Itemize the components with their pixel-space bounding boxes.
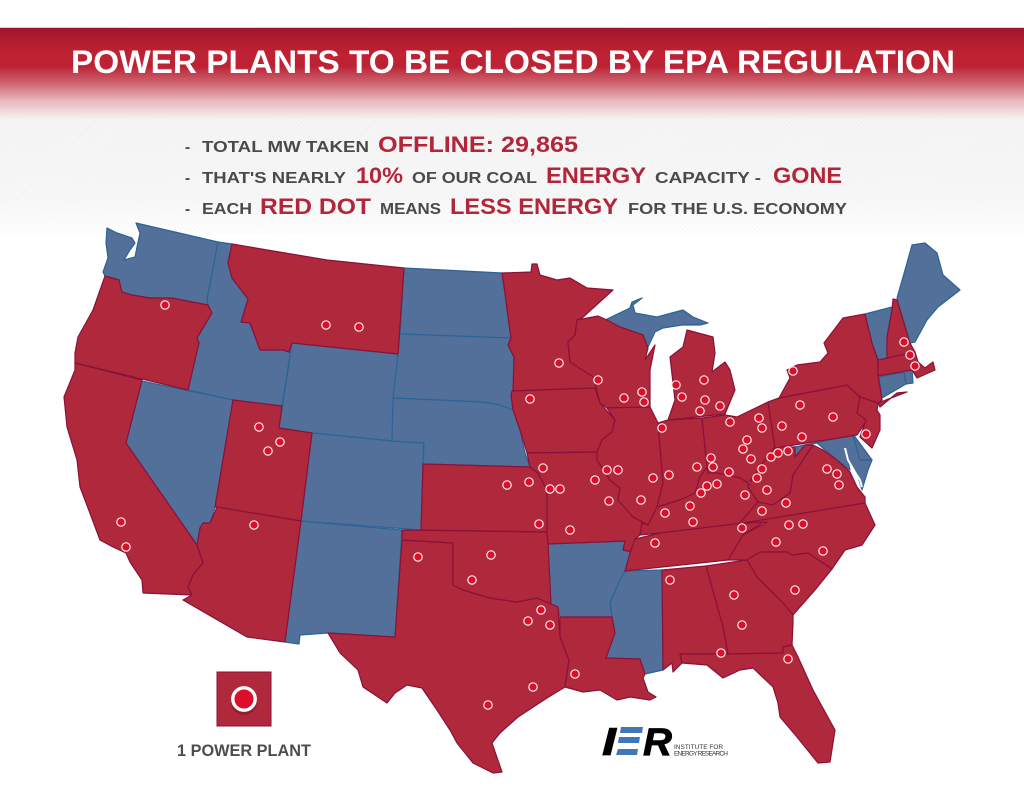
New Mexico — [285, 521, 402, 644]
South Dakota — [393, 334, 514, 410]
Kansas — [421, 464, 547, 532]
Pennsylvania — [768, 385, 867, 448]
stat line: red dot meaning: FOR THE U.S. ECONOMY — [628, 201, 848, 218]
Idaho — [188, 242, 292, 406]
stat line: red dot meaning: MEANS — [380, 201, 441, 218]
stat line: total MW offline: TOTAL MW TAKEN — [202, 139, 369, 156]
Maine — [897, 243, 960, 343]
Delaware — [853, 434, 872, 460]
title banner — [0, 27, 1024, 119]
US map — [64, 223, 960, 773]
Ohio — [702, 402, 775, 483]
Michigan upper peninsula — [605, 298, 708, 347]
Oklahoma — [402, 530, 551, 604]
stat line: total MW offline — [185, 132, 578, 157]
Massachusetts — [878, 352, 935, 378]
Indiana — [657, 418, 707, 507]
Arkansas — [548, 541, 632, 617]
Louisiana — [560, 617, 656, 700]
Minnesota — [502, 264, 613, 391]
Nevada — [126, 381, 233, 545]
logo E stripes — [616, 727, 643, 755]
South Carolina — [747, 552, 832, 615]
California — [64, 363, 203, 595]
logo letter I: I — [602, 721, 617, 764]
stat line: total MW offline: - — [185, 139, 190, 156]
legend swatch — [217, 672, 271, 726]
stat line: red dot meaning: EACH — [202, 201, 252, 218]
Mississippi — [606, 570, 663, 674]
stat line: share of coal capacity: GONE — [773, 163, 842, 188]
legend dot shadow — [231, 689, 257, 715]
IER logo — [602, 721, 728, 764]
Wyoming — [279, 343, 398, 441]
legend dot — [233, 688, 255, 710]
Montana — [228, 244, 404, 354]
stat line: share of coal capacity: OF OUR COAL — [412, 170, 537, 187]
Washington — [103, 223, 218, 305]
Arizona — [183, 507, 301, 642]
stat line: red dot meaning: LESS ENERGY — [450, 194, 618, 219]
Colorado — [301, 433, 424, 530]
stat line: share of coal capacity: THAT'S NEARLY — [202, 170, 347, 187]
Kentucky — [640, 467, 758, 535]
Vermont — [865, 307, 892, 360]
Utah — [215, 400, 312, 521]
Oregon — [75, 276, 212, 390]
Maryland — [795, 435, 872, 490]
New Hampshire — [887, 299, 915, 358]
legend: 1 power plant — [177, 672, 312, 760]
states without closures (blue) — [103, 223, 960, 674]
stat line: total MW offline: OFFLINE: 29,865 — [378, 132, 578, 157]
Michigan lower peninsula — [668, 330, 735, 420]
stat line: red dot meaning: - — [185, 201, 190, 218]
New York — [779, 314, 907, 407]
Texas — [328, 540, 569, 773]
logo letter R: R — [643, 721, 672, 764]
Rhode Island — [904, 370, 913, 384]
Florida — [680, 645, 835, 763]
Georgia — [706, 560, 793, 654]
Missouri — [527, 452, 648, 552]
logo wordmark: INSTITUTE FOR — [674, 744, 723, 751]
Connecticut — [879, 372, 906, 398]
Tennessee — [625, 520, 767, 571]
legend label: 1 POWER PLANT — [177, 741, 312, 760]
Alabama — [662, 566, 728, 672]
stat line: share of coal capacity — [185, 163, 842, 188]
logo wordmark: ENERGY RESEARCH — [674, 750, 728, 758]
stat line: share of coal capacity: - — [185, 170, 190, 187]
stat line: share of coal capacity: 10% — [356, 163, 403, 188]
West Virginia — [748, 445, 813, 505]
power plant dots — [117, 301, 919, 709]
stat line: share of coal capacity: CAPACITY - — [655, 170, 761, 187]
New Jersey — [857, 397, 880, 448]
North Dakota — [400, 268, 511, 338]
Illinois — [597, 407, 663, 525]
title: POWER PLANTS TO BE CLOSED BY EPA REGULATION — [71, 44, 955, 80]
Iowa — [511, 388, 615, 453]
states with closures (red) — [64, 244, 935, 773]
stat line: share of coal capacity: ENERGY — [546, 163, 646, 188]
stat line: red dot meaning — [185, 194, 848, 219]
stat line: red dot meaning: RED DOT — [260, 194, 372, 219]
Virginia — [738, 445, 865, 525]
Nebraska — [392, 398, 530, 467]
North Carolina — [728, 503, 875, 569]
Wisconsin — [568, 316, 655, 408]
